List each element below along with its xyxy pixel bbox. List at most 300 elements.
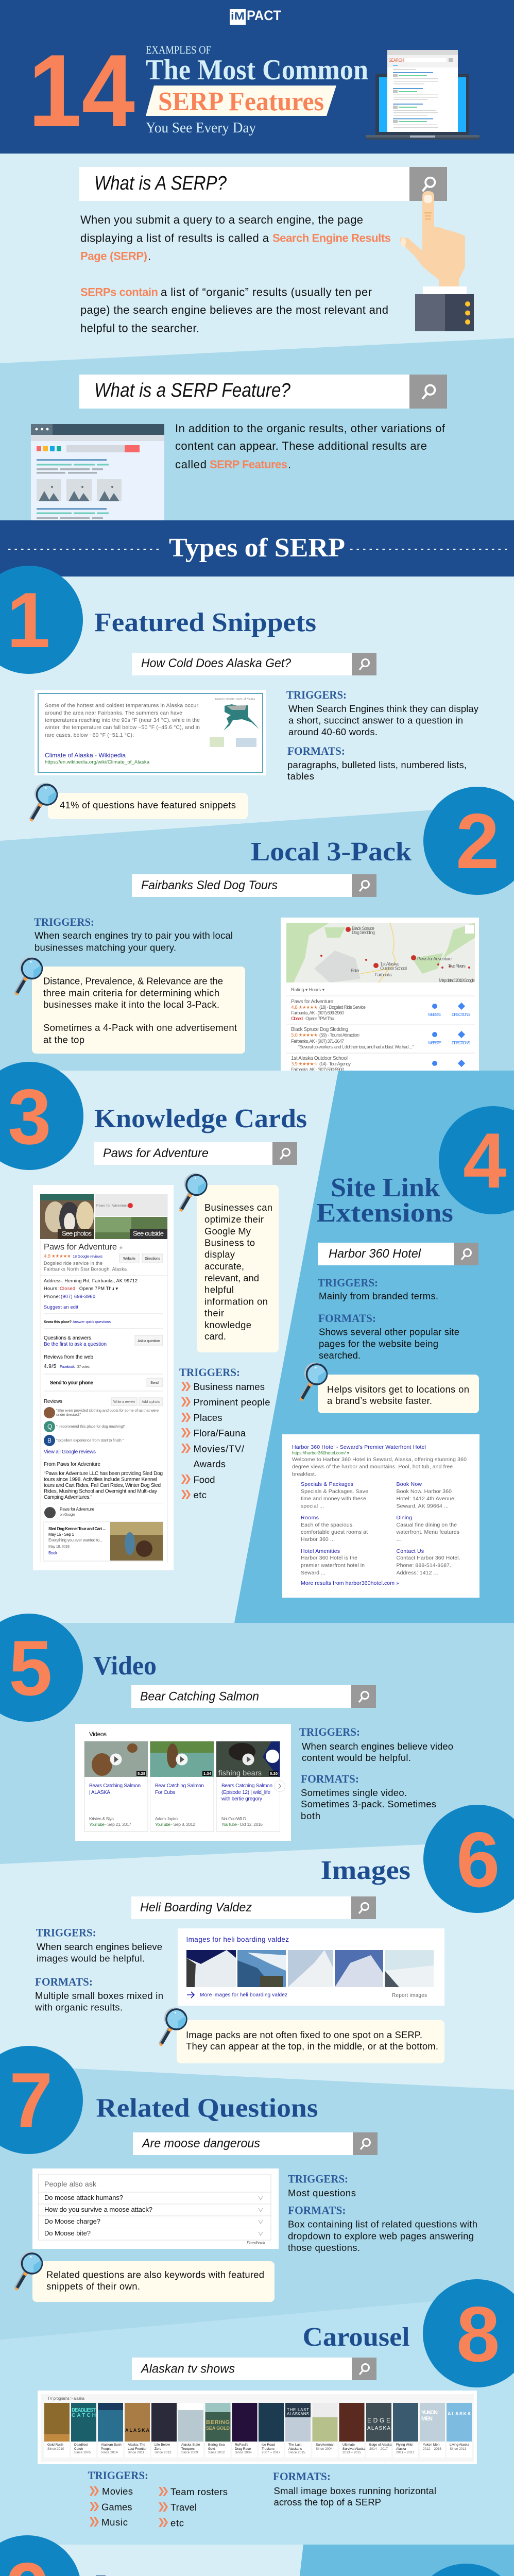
panel: knowledge card example: Ask a question [138,1340,160,1343]
triggers: related questions: Most questions [288,2188,356,2198]
text: what is a SERP: . [148,249,151,263]
logo [230,8,281,25]
icon: pointing hand [400,191,474,331]
panel: knowledge card example: View all Google reviews [44,1449,96,1455]
callout: images [177,2020,444,2063]
number badge 1 [0,566,83,674]
panel: knowledge card example: Phone: [44,1294,60,1299]
heading: knowledge cards: Knowledge Cards [94,1104,307,1133]
panel: image pack example [178,1928,444,2006]
panel: video example: fishing bears [218,1769,262,1777]
panel: carousel example: Since 2005 [74,2451,91,2454]
panel: sitelink example: ... [397,1536,401,1543]
panel: video example: - Sep 21, 2017 [105,1822,131,1827]
panel: carousel example: EDGE [367,2417,390,2424]
panel: knowledge card example: “Excellent experience from start to finish.” [56,1438,124,1443]
map [286,923,475,983]
callout: local 3-pack [32,967,245,1054]
panel: sitelink example: Casual fine dining on the [397,1522,457,1528]
formats: carousel: Small image boxes running horizontal [274,2485,436,2496]
text: what is a SERP: When you submit a query to a search engine, the page [80,213,363,226]
text: what is a SERP [80,213,391,335]
triggers: knowledge cards [179,1366,270,1500]
panel: knowledge card example: Questions & answers [44,1335,91,1341]
heading: related questions: Related Questions [96,2094,318,2123]
heading: carousel: Carousel [303,2323,410,2352]
number badge 7: 7 [9,2057,53,2144]
panel: knowledge card example: Write a review [113,1400,135,1404]
icon: magnifier [31,783,57,821]
text: SERP feature: called [175,458,207,471]
panel: video example: For Cubs [155,1790,175,1795]
panel: people also ask example: Feedback [247,2240,266,2245]
panel: knowledge card example: Add a photo [142,1400,160,1404]
post card: Book [48,1551,58,1555]
text: what is a SERP: helpful to the searcher. [80,321,199,335]
panel: knowledge card example: 4.9/5 [44,1364,56,1369]
panel: featured snippet example: https://en.wikipedia.org/wiki/Climate_of_Alaska [45,759,150,765]
triggers: images: When search engines believe [37,1941,162,1952]
text: what is a SERP: displaying a list of results is called a [80,232,269,244]
callout: knowledge cards: knowledge [204,1319,251,1330]
panel: knowledge card example: From Paws for Adventure [44,1462,100,1467]
map: Map data ©2018 Google [439,978,475,983]
panel: carousel example: Catch [74,2447,83,2451]
icon: magnifier [180,1173,207,1211]
callout: knowledge cards: Businesses can [204,1202,272,1213]
panel: people also ask example: Do moose attack humans? [44,2194,123,2201]
section background: knowledge cards [0,1071,514,1623]
panel: carousel example: Since 2004 [316,2447,333,2451]
kicker: EXAMPLES OF [146,43,211,56]
panel: sitelink example: comfortable guest rooms at [301,1529,368,1535]
panel: video example: Bears Catching Salmon [89,1783,141,1789]
triggers: carousel: TRIGGERS: [88,2469,148,2482]
triggers: knowledge cards: Food [194,1475,215,1485]
panel: knowledge card example: Suggest an edit [44,1304,78,1310]
panel: knowledge card example: · 37 votes [75,1364,90,1369]
callout: local 3-pack: Distance, Prevalence, & Relevance are the [43,976,223,986]
map: Paws for Adventure [417,956,452,961]
search bar: carousel [132,2358,376,2380]
panel: people also ask example: How do you survive a moose attack? [44,2206,152,2213]
panel: knowledge card example: “Paws for Adventure LLC has been providing Sled Dog [44,1471,163,1477]
banner: types of SERP: Types of SERP [169,533,345,563]
photos [40,1194,167,1239]
triggers: site link: TRIGGERS: [318,1276,378,1289]
panel: knowledge card example: · Opens 7PM Thu ▾ [76,1286,118,1291]
number badge 8 [423,2279,514,2387]
panel: carousel example: 2013 – 2015 [342,2451,362,2454]
logo: PACT [247,8,281,23]
panel: video example: - Oct 12, 2016 [237,1822,263,1827]
map: 1st Alaska [380,961,399,967]
triggers: carousel: Music [101,2517,128,2528]
panel: carousel example: Since 2009 [235,2451,252,2454]
triggers: knowledge cards: Flora/Fauna [194,1428,246,1438]
panel: carousel example: Deadliest [74,2443,88,2447]
panel: sitelink example: Contact Us [397,1548,424,1554]
callout: knowledge cards: Business to [204,1238,255,1248]
search bar: video [131,1685,376,1708]
section background: video [0,1623,514,1865]
triggers: images: images would be helpful. [37,1953,145,1964]
panel: video example: 5:20 [270,1771,278,1776]
search bar: images: Heli Boarding Valdez [140,1901,252,1914]
panel: image pack example: Report images [392,1993,427,1998]
triggers: related questions [288,2172,356,2198]
formats: featured snippets: FORMATS: [287,744,345,757]
panel: sitelink example: Each of the spacious, [301,1522,354,1528]
triggers: site link [318,1276,438,1301]
text: what is a SERP: a list of “organic” results (usually ten per [161,285,372,299]
callout: images: They can appear at the top, in the middle, or at the bottom. [186,2041,438,2052]
section background: instant answers [0,2545,514,2576]
triggers: featured snippets: TRIGGERS: [286,688,347,701]
panel: local pack example: 1st Alaska Outdoor School [291,1056,348,1061]
posters [44,2403,472,2442]
panel: knowledge card example: Address: Herning Rd, Fairbanks, AK 99712 [44,1278,138,1283]
number badge 4 [439,1106,514,1214]
panel: local pack example: Black Spruce Dog Sledding [291,1027,348,1032]
panel: carousel example: Alaska State [181,2443,200,2447]
panel: video example: 1:34 [203,1771,212,1776]
section background: what is a SERP feature [0,338,514,520]
panel: carousel example: DEADLIEST [72,2408,96,2413]
map: alaska climate [210,698,259,747]
formats: related questions [288,2204,477,2253]
title line: The Most Common [146,54,368,86]
panel: sitelink example: Contact Harbor 360 Hotel. [397,1555,460,1561]
number badge 7 [0,2046,83,2154]
text: what is a SERP: SERPs contain [80,285,158,299]
panel: video example: Nat Geo WILD [221,1816,246,1821]
callout: related questions: snippets of their own. [46,2281,140,2292]
panel: local pack example: Paws for Adventure [291,999,333,1005]
post card: Everything you ever wanted to... [48,1538,102,1543]
panel: carousel example: Since 2012 [208,2451,225,2454]
callout: knowledge cards: relevant, and [204,1273,259,1283]
panel: sitelink example: https://harbor360hotel.com/ ▾ [292,1450,350,1455]
formats: featured snippets: paragraphs, bulleted lists, numbered lists, [287,759,467,770]
panel: people also ask example [32,2168,279,2249]
search bar: knowledge cards: Paws for Adventure [103,1146,209,1160]
panel: knowledge card example: Fairbanks North Star Borough, Alaska [44,1266,127,1272]
panel: local pack example: “Several co-workers, and I, did their tour, and had a blast. We had ...” [298,1044,414,1049]
formats: video: Sometimes 3-pack. Sometimes [301,1799,436,1809]
panel: carousel example: Life Below [155,2443,170,2447]
number badge 5 [0,1614,83,1722]
section background: local 3-pack [0,804,514,1071]
formats: carousel [273,2470,436,2507]
panel: knowledge card example: Camping Adventures.” [44,1495,92,1500]
panel: knowledge card example: Directions [145,1257,160,1261]
triggers: video: TRIGGERS: [299,1725,360,1738]
map: Black Spruce [352,926,374,931]
panel: local pack example: (14) · Tour Agency [319,1061,351,1066]
panel: knowledge card example: Paws for Adventure [60,1507,95,1512]
panel: sitelink example: Welcome to Harbor 360 Hotel in Seward, Alaska, offering stunning 360 [292,1456,467,1463]
panel: local pack example: WEBSITE [428,1012,441,1017]
panel: carousel example: THE LAST [287,2408,309,2412]
text: SERP feature: SERP Features [210,458,287,471]
photos: See photos [62,1229,92,1238]
panel: sitelink example: waterfront. Menu features [396,1529,459,1535]
map: Two Rivers [448,963,466,969]
panel: carousel example: BERING [206,2419,230,2426]
panel: video example [75,1724,291,1841]
panel: knowledge card example: Answer quick questions [73,1320,111,1324]
panel: carousel example: Since 2010 [47,2447,64,2451]
triggers: carousel: Games [101,2502,132,2512]
panel: featured snippet example: temperatures reaching into the 90s °F (near 34 °C), while in the [45,717,200,723]
panel: carousel example: YUKON [421,2410,438,2416]
callout: knowledge cards: their [204,1308,224,1318]
formats: related questions: Box containing list of related questions with [288,2218,477,2230]
text: SERP feature: content can appear. These additional results are [175,439,427,452]
triggers: local 3-pack: TRIGGERS: [34,916,94,928]
panel: sitelink example: Specials & Packages [301,1481,353,1487]
callout: related questions: Related questions are also keywords with featured [46,2269,264,2280]
panel: sitelink example: Seward ... [301,1570,325,1576]
triggers: featured snippets: around 40-60 words. [288,726,378,737]
search bar: what is a SERP feature: What is a SERP Feature? [94,380,291,401]
number badge 3 [0,1062,83,1170]
panel: carousel example [38,2391,477,2464]
laptop illustration [366,50,479,140]
triggers: local 3-pack [34,916,233,953]
map: Fairbanks [375,972,392,977]
formats: carousel: across the top of a SERP [274,2497,381,2507]
formats: related questions: those questions. [288,2242,360,2253]
callout: knowledge cards: accurate, [204,1261,244,1272]
triggers: featured snippets: a short, succinct answer to a question in [288,715,463,725]
formats: related questions: FORMATS: [288,2204,346,2216]
formats: video: both [301,1810,320,1821]
panel: knowledge card example: Be the first to ask a question [44,1342,107,1347]
triggers: site link: Mainly from branded terms. [319,1291,438,1301]
panel: sitelink example: special ... [301,1503,324,1510]
panel: sitelink example: Dining [397,1515,412,1521]
formats: video [301,1772,436,1821]
triggers: featured snippets [286,688,479,737]
laptop illustration: SEARCH [389,58,404,63]
header banner [0,0,514,154]
triggers: images [36,1926,162,1964]
big number 14: 14 [28,33,135,148]
panel: knowledge card example: (907) 699-3960 [61,1294,95,1299]
number badge 6 [423,1805,514,1913]
panel: carousel example: Yukon Men [423,2443,440,2447]
number badge 1: 1 [7,577,50,664]
panel: carousel example: Drag Race [235,2447,251,2451]
panel: local pack example: Fairbanks, AK · (907) 371-3647 [291,1039,344,1044]
panel: sitelink example: Specials & Packages. Save [301,1488,368,1495]
formats: images: Multiple small boxes mixed in [35,1990,163,2001]
callout: knowledge cards: display [204,1249,235,1260]
text: SERP feature: . [288,458,291,471]
search bar: what is a SERP [79,167,447,201]
triggers: featured snippets: When Search Engines think they can display [288,703,479,714]
panel: knowledge card example: “I recommend this place for dog mushing!” [56,1424,126,1429]
icon: magnifier [16,957,42,995]
search bar: site link [318,1243,478,1265]
panel: knowledge card example: Hours: [44,1286,59,1291]
section background: carousel [0,2294,514,2545]
panel: sitelink example [282,1434,479,1598]
search bar: site link: Harbor 360 Hotel [329,1247,421,1261]
panel: carousel example: 2014 – 2017 [369,2447,388,2451]
panel: knowledge card example: 4.8 ★★★★★ [44,1254,71,1259]
heading: video: Video [93,1651,157,1681]
panel: knowledge card example: B [47,1437,52,1444]
panel: sitelink example: More results from harbor360hotel.com » [301,1580,399,1586]
panel: knowledge card example: Rides, Mushing School and Overnight and Multi-day [44,1489,157,1494]
panel: local pack example: Rating ▾ Hours ▾ [291,987,324,992]
panel: people also ask example: People also ask [44,2180,97,2188]
panel: sitelink example: premier waterfront hotel in [301,1562,365,1568]
triggers: video: When search engines believe video [302,1741,453,1752]
search bar: local 3-pack: Fairbanks Sled Dog Tours [141,878,278,892]
triggers: knowledge cards: Movies/TV/ [194,1444,245,1454]
panel: video example: YouTube [221,1822,237,1827]
callout: local 3-pack: three main criteria for determining which [43,987,219,998]
photos: Paws for Adventure [96,1204,128,1208]
callout: site link [318,1375,479,1413]
formats: images: with organic results. [35,2002,123,2012]
triggers: knowledge cards: Awards [194,1459,226,1469]
panel: local pack example: · Opens 7PM Thu [303,1016,334,1021]
panel: local pack example: (18) · Dogsled Ride Service [319,1005,366,1010]
heading: site link extensions [316,1173,453,1228]
search bar: related questions [133,2132,378,2155]
panel: carousel example: 2007 – 2017 [262,2451,281,2454]
panel: people also ask example: Do Moose bite? [44,2229,91,2237]
panel: featured snippet example: around the area near Fairbanks. The summers can have [45,710,182,716]
panel: knowledge card example: tours since 1998. Activities include Summer Kennel [44,1477,157,1483]
number badge 2 [423,787,514,895]
callout: local 3-pack: businesses make it into the local 3-Pack. [43,999,219,1010]
panel: featured snippet example [35,690,266,775]
panel: knowledge card example: “She even provided clothing and boots for some of us that were [56,1408,159,1413]
panel: sitelink example: breakfast. [292,1471,316,1478]
panel: local pack example: 4.8 ★★★★★ [291,1005,318,1010]
panel: featured snippet example: Climate of Alaska - Wikipedia [45,752,126,759]
callout: site link: Helps visitors get to locations on [327,1384,469,1395]
panel: knowledge card example [33,1185,174,1570]
panel: video example: Adam Japko [155,1816,178,1821]
triggers: local 3-pack: businesses matching your query. [35,942,176,953]
search bar: images [131,1896,376,1919]
callout: images: Image packs are not often fixed to one spot on a SERP. [186,2029,422,2040]
callout: site link: a brand’s website faster. [327,1395,432,1406]
triggers: knowledge cards: Prominent people [194,1397,270,1408]
heading: featured snippets: Featured Snippets [94,608,316,637]
heading: site link extensions: Site Link [331,1173,440,1202]
formats: site link [318,1312,459,1361]
callout: knowledge cards [197,1185,279,1352]
search bar: what is a SERP: What is A SERP? [94,173,227,194]
heading: site link extensions: Extensions [316,1198,453,1228]
formats: video: FORMATS: [301,1772,359,1785]
panel: local pack example: WEBSITE [428,1041,441,1045]
triggers: video: content would be helpful. [302,1752,411,1763]
panel: people also ask example: Do Moose charge? [44,2217,100,2225]
panel: local pack example: Closed [291,1016,303,1021]
panel: sitelink example: Hotel Amenities [301,1548,340,1554]
panel: video example: - Sep 8, 2012 [171,1822,195,1827]
panel: sitelink example: Book Now. Harbor 360 [397,1488,452,1495]
panel: local pack example: DIRECTIONS [452,1041,470,1045]
icon: magnifier [161,2007,186,2045]
callout: knowledge cards: optimize their [204,1214,264,1225]
panel: image pack example: More images for heli boarding valdez [200,1992,287,1998]
panel: knowledge card example: Send to your phone [50,1380,93,1386]
panel: carousel example: Since 2011 [128,2451,144,2454]
section background: related questions [0,2065,514,2349]
panel: knowledge card example: under dressed.” [56,1412,81,1417]
panel: sitelink example: time and money with these [301,1496,366,1502]
formats: featured snippets [287,744,467,782]
map: Ester [351,968,359,973]
triggers: images: TRIGGERS: [36,1926,96,1939]
panel: carousel example: ALASKA [367,2426,390,2431]
post card: May 18, 2018 [48,1544,70,1549]
heading: local 3-pack: Local 3-Pack [251,837,412,867]
panel: knowledge card example: Reviews [44,1399,62,1404]
panel: local pack example [281,918,479,1072]
photos: See outside [133,1229,164,1238]
panel: carousel example: Gold [208,2447,215,2451]
panel: knowledge card example: Facebook [60,1364,75,1369]
panel: knowledge card example: tours and Cart Rides, Fall Cart Rides, Winter Dog Sled [44,1483,161,1488]
panel: carousel example: Gold Rush [47,2443,63,2447]
banner: types of SERP [0,520,514,577]
panel: sitelink example: Seward, AK 99664 ... [397,1503,449,1510]
post card [44,1522,163,1561]
callout: local 3-pack: Sometimes a 4-Pack with one advertisement [43,1022,237,1033]
number badge 3: 3 [8,1073,52,1161]
panel: carousel example: Since 2013 [155,2451,172,2454]
panel: video example: Kristen & Siya [89,1816,114,1821]
number badge 4: 4 [463,1117,507,1205]
panel: sitelink example: degree views of the harbor and mountains. Pool, hot tub, and free [292,1464,453,1470]
panel: video example: | ALASKA [89,1790,110,1795]
panel: video example: 5:28 [138,1771,145,1776]
formats: images: FORMATS: [35,1975,93,1988]
panel: knowledge card example: Send [150,1381,159,1385]
icon: magnifier [16,2251,42,2290]
panel: knowledge card example: on Google [60,1512,75,1517]
search bar: featured snippets: How Cold Does Alaska Get? [141,656,292,670]
logo: iM [231,11,245,22]
search bar: video: Bear Catching Salmon [140,1690,259,1703]
formats: site link: Shows several other popular site [319,1326,459,1337]
triggers: related questions: TRIGGERS: [288,2172,348,2185]
panel: carousel example: Bering Sea [208,2443,225,2447]
panel: sitelink example: Address: 1412 ... [397,1570,438,1576]
search bar: knowledge cards [94,1142,297,1165]
panel: carousel example: 2011 – 2012 [396,2451,415,2454]
panel: carousel example: The Last [288,2443,301,2447]
callout: knowledge cards: card. [204,1331,226,1342]
panel: video example: Videos [89,1731,107,1738]
panel: carousel example: CATCH [72,2413,96,2418]
panel: carousel example: Ultimate [342,2443,355,2447]
triggers: video [299,1725,453,1763]
subtitle: You See Every Day [146,120,256,136]
panel: carousel example: People [101,2447,112,2451]
